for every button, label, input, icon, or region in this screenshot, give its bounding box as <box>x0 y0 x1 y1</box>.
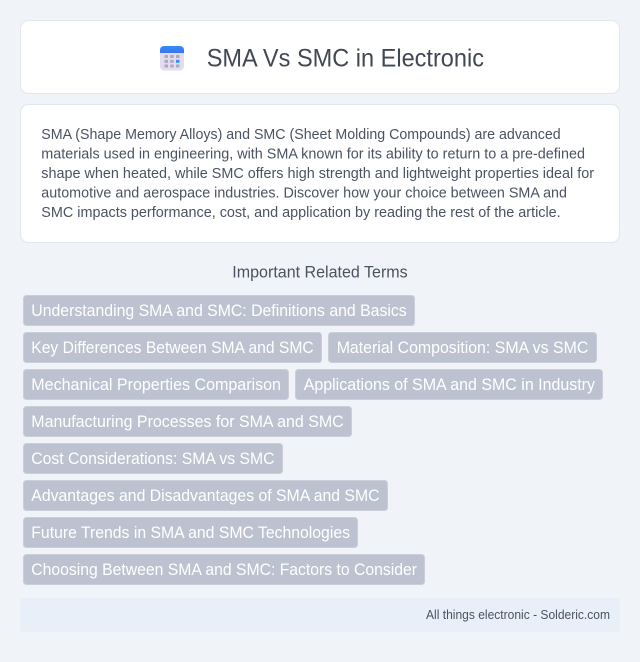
description text: automotive and aerospace industries. Discover how your choice between SMA and <box>41 184 567 202</box>
title: SMA Vs SMC in Electronic <box>207 45 484 73</box>
tag: key differences <box>24 332 322 362</box>
tag: future trends: Future Trends in SMA and SMC Technologies <box>31 523 350 542</box>
tag: applications: Applications of SMA and SMC in Industry <box>304 375 596 394</box>
header panel <box>20 20 620 94</box>
tag: mechanical properties <box>24 370 288 400</box>
panel: description <box>20 104 620 242</box>
tag: applications <box>296 370 602 400</box>
footer text: All things electronic - Solderic.com <box>426 608 610 622</box>
tag: cost <box>24 444 282 474</box>
tag: manufacturing <box>24 406 352 436</box>
tag: choosing <box>24 554 424 584</box>
heading: important related terms: Important Related Terms <box>232 264 408 282</box>
tag: understanding: Understanding SMA and SMC: Definitions and Basics <box>31 301 407 320</box>
icon: calendar <box>160 46 184 70</box>
tag: choosing: Choosing Between SMA and SMC: Factors to Consider <box>31 560 417 579</box>
tag: manufacturing: Manufacturing Processes for SMA and SMC <box>31 412 344 431</box>
tag: key differences: Key Differences Between SMA and SMC <box>31 338 314 357</box>
tag: mechanical properties: Mechanical Properties Comparison <box>31 375 281 394</box>
description text: SMC impacts performance, cost, and application by reading the rest of the article. <box>41 204 561 221</box>
panel: related term tags <box>24 296 602 584</box>
tag: material composition: Material Composition: SMA vs SMC <box>337 338 588 357</box>
tag: understanding <box>24 296 414 326</box>
tag: advantages <box>24 480 388 510</box>
tag: future trends <box>24 518 358 548</box>
tag: material composition <box>328 332 596 362</box>
description text: materials used in engineering, with SMA known for its ability to return to a pre-defined <box>41 146 585 162</box>
footer <box>20 598 620 632</box>
tag: advantages: Advantages and Disadvantages of SMA and SMC <box>31 486 380 505</box>
tag: cost: Cost Considerations: SMA vs SMC <box>31 449 274 468</box>
description text <box>41 126 594 221</box>
description text: SMA (Shape Memory Alloys) and SMC (Sheet Molding Compounds) are advanced <box>41 126 561 143</box>
description text: shape when heated, while SMC offers high strength and lightweight properties ideal for <box>41 165 594 182</box>
